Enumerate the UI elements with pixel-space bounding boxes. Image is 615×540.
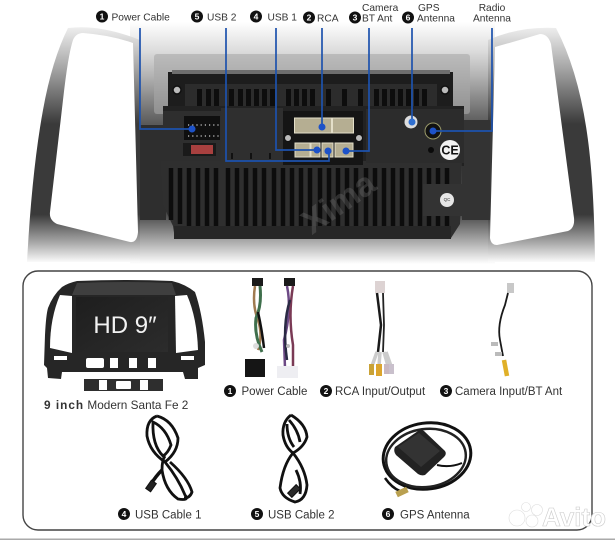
top label: RCA: RCA: [317, 14, 339, 24]
connector base: [163, 106, 464, 166]
top label: Camera BT Ant: Camera: [362, 3, 399, 14]
top label: USB 2: [191, 10, 237, 24]
connectors: upper and lower rows: [294, 118, 354, 157]
top label: RCA: [303, 12, 339, 24]
QC sticker: QC: [444, 197, 451, 202]
Avito watermark: [509, 502, 606, 532]
CE mark: CE: [441, 144, 459, 158]
top label: USB 2: USB 2: [207, 12, 237, 24]
left connector plate: [163, 111, 221, 161]
caption: RCA Input/Output: RCA Input/Output: [335, 386, 426, 398]
CE mark: [440, 140, 460, 160]
top label: USB 2: 5: [195, 12, 200, 22]
panel: accessories: [23, 271, 592, 530]
top label: GPS Antenna: [402, 3, 455, 24]
top label: GPS Antenna: GPS: [418, 3, 440, 14]
RCA cable: [369, 281, 394, 376]
caption: USB Cable 1: USB Cable 1: [135, 510, 201, 522]
photo: back of head unit: [27, 22, 595, 264]
caption: USB Cable 2: 5: [255, 509, 260, 519]
radio socket: [425, 123, 441, 139]
left window frame: [27, 27, 140, 262]
connector housing: [283, 111, 363, 165]
caption: Power Cable: 1: [228, 386, 233, 396]
caption: USB Cable 1: 4: [122, 509, 127, 519]
top label: Power Cable: [96, 10, 170, 24]
caption: Camera Input/BT Ant: Camera Input/BT Ant: [455, 386, 563, 398]
top label: Camera BT Ant: BT Ant: [362, 14, 393, 24]
mounting plate: [154, 54, 470, 114]
left window: [50, 33, 138, 242]
top label: Radio Antenna: Antenna: [473, 14, 511, 24]
GPS socket: [404, 116, 418, 128]
housing screw: [284, 134, 292, 142]
camera cable: [491, 283, 514, 376]
screen with HD 9 label: [76, 297, 168, 352]
GPS antenna: [379, 417, 475, 497]
red fuse: [183, 143, 216, 156]
head unit product photo: [44, 280, 205, 391]
watermark: Xima: [295, 163, 384, 242]
vent slots: [197, 89, 427, 111]
head unit product photo: HD 9″: [93, 312, 157, 339]
top label: Camera BT Ant: [349, 3, 399, 24]
dash frame background: [130, 22, 495, 264]
USB cable 2: [280, 415, 307, 502]
right antenna plate: [366, 109, 464, 163]
caption: USB Cable 2: USB Cable 2: [268, 510, 334, 522]
blue callout lines: [140, 28, 492, 161]
QC sticker plate: [423, 184, 463, 216]
caption: GPS Antenna: 6: [386, 509, 391, 519]
caption: 9 inch Modern Santa Fe 2: 9 inch Modern Santa Fe 2: [44, 398, 188, 412]
top label: GPS Antenna: Antenna: [417, 14, 455, 24]
side bracket shadow: [140, 125, 166, 220]
power socket: [184, 116, 220, 140]
top label: Radio Antenna: Radio: [479, 3, 505, 14]
caption: GPS Antenna: GPS Antenna: [400, 510, 470, 522]
caption: Power Cable: Power Cable: [242, 386, 307, 398]
right window frame: [488, 28, 595, 262]
top label: USB 1: [250, 10, 297, 24]
top label: Power Cable: 1: [100, 12, 105, 22]
corner screws: [173, 86, 181, 94]
top label: USB 1: USB 1: [268, 12, 297, 24]
Avito watermark: Avito: [542, 502, 606, 532]
caption: RCA Input/Output: 2: [324, 386, 329, 396]
middle plate: [221, 108, 283, 161]
right window: [490, 34, 574, 245]
footer rule: [0, 538, 615, 540]
unit upper body: [168, 72, 453, 122]
top label: Power Cable: Power Cable: [112, 12, 170, 24]
top label: GPS Antenna: 6: [406, 12, 411, 22]
caption: Camera Input/BT Ant: 3: [444, 386, 449, 396]
heat sink: [160, 161, 462, 239]
power cable harnesses: [245, 278, 298, 378]
top label: Camera BT Ant: 3: [353, 12, 358, 22]
QC sticker: [440, 193, 454, 207]
USB cable 1: [146, 416, 192, 500]
top label: RCA: 2: [307, 12, 312, 22]
top label: USB 1: 4: [254, 12, 259, 22]
